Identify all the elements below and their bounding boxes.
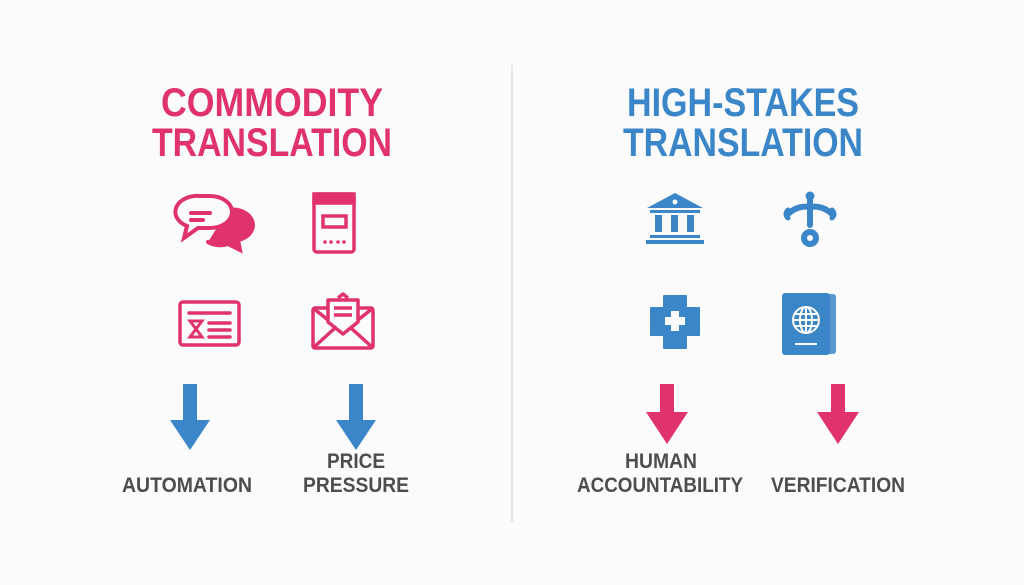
title: high-stakes translation (623, 81, 863, 165)
labels: AUTOMATION (122, 474, 252, 497)
icon: chat bubbles (175, 196, 253, 250)
labels: PRICE (327, 450, 385, 473)
labels (122, 450, 905, 497)
icon: envelope with letter (313, 294, 373, 348)
icon: hanger symbol (786, 192, 834, 247)
labels: PRESSURE (303, 474, 409, 497)
title: commodity translation (152, 81, 392, 165)
icon: browser window (314, 194, 354, 252)
icon: medical cross (651, 296, 699, 348)
arrow: verification (817, 384, 859, 444)
title: commodity translation: COMMODITY (161, 81, 383, 125)
arrow: automation (170, 384, 210, 450)
icon: id card (180, 302, 239, 345)
title: high-stakes translation: TRANSLATION (623, 121, 863, 165)
arrow: price pressure (336, 384, 376, 450)
icon: bank (646, 193, 704, 244)
labels: HUMAN (625, 450, 697, 473)
labels: ACCOUNTABILITY (577, 474, 743, 497)
icon: passport (782, 293, 836, 355)
title: commodity translation: TRANSLATION (152, 121, 392, 165)
arrow: human accountability (646, 384, 688, 444)
title: high-stakes translation: HIGH-STAKES (627, 81, 859, 125)
labels: VERIFICATION (771, 474, 905, 497)
